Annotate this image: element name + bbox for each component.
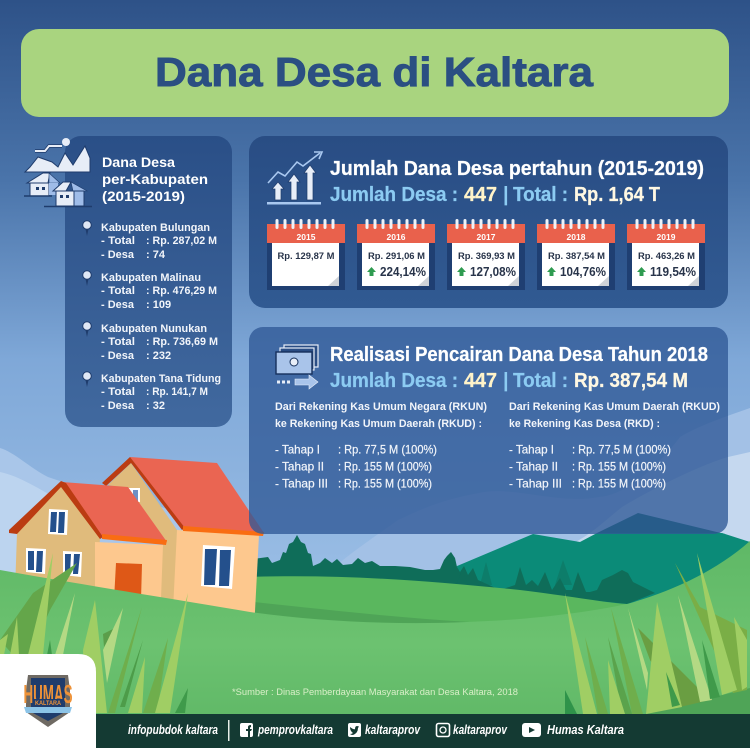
- column: RKUN to RKUD: - Tahap I: [275, 442, 320, 456]
- entry: Bulungan: : 74: [146, 249, 166, 261]
- entry: Tana Tidung: - Desa: [101, 400, 135, 412]
- illustration: houses: [9, 457, 264, 630]
- column: RKUN to RKUD: - Tahap II: [275, 460, 324, 474]
- footer: twitter: [348, 722, 421, 737]
- summary line: |: [503, 370, 509, 392]
- entry: Nunukan: - Desa: [101, 350, 135, 362]
- calendar 2016: Rp. 291,06 M: [368, 251, 425, 262]
- calendar 2015: Rp. 129,87 M: [278, 251, 335, 262]
- entry: Bulungan: - Total: [101, 235, 135, 247]
- entry: Bulungan: Kabupaten Bulungan: [101, 222, 210, 234]
- summary line: Rp. 387,54 M: [574, 370, 688, 392]
- entry: Bulungan: : Rp. 287,02 M: [146, 235, 217, 247]
- icon: growth chart: [267, 152, 322, 204]
- entry: Tana Tidung: : 32: [146, 400, 165, 412]
- house door: [114, 563, 142, 600]
- title: Dana Desa di Kaltara: [155, 49, 594, 95]
- entry: Malinau: : 109: [146, 299, 171, 311]
- calendar 2019: 119,54%: [650, 265, 696, 279]
- calendar 2017: [447, 220, 525, 290]
- calendar 2017: Rp. 369,93 M: [458, 251, 515, 262]
- grass: right blades: [565, 553, 750, 714]
- back mountains: [450, 513, 750, 620]
- entry: Tana Tidung: : Rp. 141,7 M: [146, 386, 208, 398]
- calendar 2017: 127,08%: [470, 265, 516, 279]
- hills: [245, 576, 660, 640]
- footer: youtube: [522, 722, 624, 737]
- footer bar: [0, 714, 750, 748]
- logo: Humas Kaltara shield: [24, 675, 72, 727]
- column: RKUN to RKUD: ke Rekening Kas Umum Daerah (RKUD) :: [275, 418, 482, 430]
- calendar 2017: 2017: [477, 232, 496, 242]
- heading: Realisasi Pencairan Dana Desa Tahun 2018: [330, 344, 708, 366]
- entry: Malinau: - Total: [101, 285, 135, 297]
- entry: Bulungan: - Desa: [101, 249, 135, 261]
- logo: Humas Kaltara shield: HUMAS: [24, 679, 72, 709]
- column: RKUD to RKD: - Tahap II: [509, 460, 558, 474]
- entry: Bulungan: [83, 221, 217, 261]
- column: RKUD to RKD: : Rp. 155 M (100%): [572, 460, 666, 474]
- entry: Nunukan: : Rp. 736,69 M: [146, 336, 218, 348]
- calendar 2016: 224,14%: [380, 265, 426, 279]
- footer: instagram: [436, 722, 508, 737]
- entry: Malinau: [83, 271, 217, 311]
- column: RKUN to RKUD: : Rp. 155 M (100%): [338, 476, 432, 490]
- column: RKUN to RKUD: [275, 401, 487, 490]
- entry: Tana Tidung: - Total: [101, 386, 135, 398]
- column: RKUD to RKD: ke Rekening Kas Desa (RKD) :: [509, 418, 660, 430]
- footer: instagram: kaltaraprov: [453, 722, 508, 737]
- icon: money transfer: [276, 345, 318, 389]
- summary line: [330, 184, 660, 206]
- summary line: Jumlah Desa :: [330, 370, 458, 392]
- source note: *Sumber : Dinas Pemberdayaan Masyarakat dan Desa Kaltara, 2018: [232, 687, 518, 697]
- panel: per-kabupaten: [24, 136, 232, 427]
- house windows: [26, 509, 235, 589]
- footer: twitter: kaltaraprov: [365, 722, 421, 737]
- entry: Nunukan: [83, 322, 218, 362]
- gable window: [128, 488, 140, 502]
- column: RKUN to RKUD: Dari Rekening Kas Umum Negara (RKUN): [275, 401, 487, 413]
- logo: Humas Kaltara shield: KALTARA: [35, 700, 61, 707]
- entry: Tana Tidung: Kabupaten Tana Tidung: [101, 373, 221, 385]
- summary line: |: [503, 184, 509, 206]
- summary line: Rp. 1,64 T: [574, 184, 660, 206]
- entry: Malinau: - Desa: [101, 299, 135, 311]
- entry: Malinau: : Rp. 476,29 M: [146, 285, 217, 297]
- entry: Nunukan: Kabupaten Nunukan: [101, 323, 207, 335]
- calendar 2018: [537, 220, 615, 290]
- column: RKUN to RKUD: - Tahap III: [275, 476, 328, 490]
- grass: left blades: [0, 553, 188, 713]
- column: RKUD to RKD: : Rp. 155 M (100%): [572, 476, 666, 490]
- summary line: 447: [464, 184, 497, 206]
- panel: realisasi pencairan: [249, 327, 728, 534]
- calendar 2019: [627, 220, 705, 290]
- column: RKUN to RKUD: : Rp. 77,5 M (100%): [338, 442, 437, 456]
- column: RKUD to RKD: - Tahap III: [509, 476, 562, 490]
- calendar 2016: [357, 220, 435, 290]
- column: RKUD to RKD: - Tahap I: [509, 442, 554, 456]
- calendar 2018: Rp. 387,54 M: [548, 251, 605, 262]
- calendar 2018: 104,76%: [560, 265, 606, 279]
- column: RKUD to RKD: : Rp. 77,5 M (100%): [572, 442, 671, 456]
- foreground hill: [0, 541, 750, 748]
- panel heading: per-Kabupaten: [102, 171, 208, 187]
- logo card: [0, 654, 96, 748]
- icon: village: [24, 138, 92, 206]
- calendar 2015: 2015: [297, 232, 316, 242]
- panel heading: Dana Desa: [102, 154, 175, 170]
- entry: Tana Tidung: [83, 372, 221, 412]
- calendar 2019: Rp. 463,26 M: [638, 251, 695, 262]
- column: RKUD to RKD: [509, 401, 720, 490]
- footer: infopubdok: infopubdok kaltara: [128, 722, 218, 737]
- panel: jumlah dana desa pertahun: [249, 136, 728, 308]
- entry: Malinau: Kabupaten Malinau: [101, 272, 201, 284]
- calendar 2015: [267, 220, 345, 290]
- footer: youtube: Humas Kaltara: [547, 722, 624, 737]
- column: RKUD to RKD: Dari Rekening Kas Umum Daerah (RKUD): [509, 401, 720, 413]
- summary line: 447: [464, 370, 497, 392]
- calendar 2018: 2018: [567, 232, 586, 242]
- calendar 2016: 2016: [387, 232, 406, 242]
- entry: Nunukan: : 232: [146, 350, 171, 362]
- title banner: [21, 29, 729, 117]
- summary line: Jumlah Desa :: [330, 184, 458, 206]
- entry: Nunukan: - Total: [101, 336, 135, 348]
- calendar 2019: 2019: [657, 232, 676, 242]
- heading: Jumlah Dana Desa pertahun (2015-2019): [330, 158, 704, 180]
- tree line: [245, 535, 655, 610]
- summary line: Total :: [513, 370, 568, 392]
- column: RKUN to RKUD: : Rp. 155 M (100%): [338, 460, 432, 474]
- footer: facebook: [240, 722, 333, 737]
- panel heading: (2015-2019): [102, 188, 185, 204]
- summary line: Total :: [513, 184, 568, 206]
- footer: facebook: pemprovkaltara: [257, 722, 333, 737]
- summary line: [330, 370, 688, 392]
